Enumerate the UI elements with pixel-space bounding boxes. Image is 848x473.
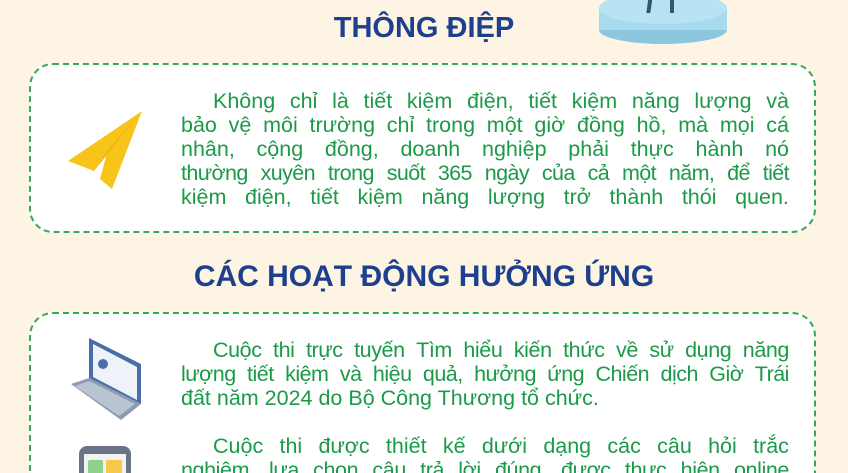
text: message: suốt xyxy=(387,161,425,185)
text: message: trở xyxy=(564,185,591,209)
text: activity 1: về xyxy=(616,338,638,362)
text: activity 1: quả, xyxy=(423,362,463,386)
panel: activities xyxy=(29,312,816,473)
text: message: cá xyxy=(766,113,789,137)
text: activity 1: trực xyxy=(306,338,343,362)
text: message: cộng xyxy=(257,137,303,161)
icon: paper plane xyxy=(68,111,142,189)
text: activity 2: kế xyxy=(443,434,466,458)
text: message: kiệm xyxy=(572,89,617,113)
text: message: một xyxy=(622,161,656,185)
text: activity 1: hiệu xyxy=(373,362,412,386)
text: message: hồ, xyxy=(637,113,666,137)
text: message xyxy=(181,89,790,209)
text: message: kiệm xyxy=(357,185,403,209)
text: message: điện, xyxy=(467,89,514,113)
text: activity 1: hiểu xyxy=(463,338,502,362)
text: activity 2: được xyxy=(318,434,370,458)
text: message: lượng xyxy=(694,89,752,113)
text: message: môi xyxy=(263,113,298,137)
text: message: hành xyxy=(696,137,743,161)
text: message: ngày xyxy=(485,161,529,185)
text: activity 1: năng xyxy=(743,338,789,362)
text: message: trường xyxy=(310,113,375,137)
text: message: chỉ xyxy=(290,89,317,113)
text: message: quen. xyxy=(735,185,789,209)
text: activity 1: kiến xyxy=(514,338,552,362)
text: message: thường xyxy=(181,161,248,185)
text: message: đồng xyxy=(577,113,625,137)
text: message: kiệm xyxy=(181,185,226,209)
text: message: nhân, xyxy=(181,137,235,161)
text: activity 2: trắc xyxy=(753,434,789,458)
icon: plug xyxy=(599,0,727,44)
text: activity 1: thức xyxy=(563,338,605,362)
text: message: mà xyxy=(678,113,708,137)
text: activity 2: dạng xyxy=(543,434,591,458)
text: activity 1: Cuộc xyxy=(213,338,262,362)
text: activity 1: dịch xyxy=(660,362,698,386)
text: message: tiết xyxy=(528,89,557,113)
text: activity 1: lượng xyxy=(181,362,236,386)
text: activity 2: thi xyxy=(279,434,302,458)
text: message: vệ xyxy=(229,113,251,137)
text: message: điện, xyxy=(245,185,292,209)
text: message: thực xyxy=(631,137,674,161)
text: activity 1: thi xyxy=(273,338,295,362)
text: activity 1: hưởng xyxy=(474,362,536,386)
text: message: một xyxy=(487,113,523,137)
text: message: nó xyxy=(765,137,789,161)
text: message: để xyxy=(727,161,750,185)
text: message: trong xyxy=(426,113,475,137)
title: các hoạt động hưởng ứng: CÁC HOẠT ĐỘNG HƯỞNG ỨNG xyxy=(194,260,654,293)
text: message: xuyên xyxy=(261,161,315,185)
text: activity 2: hỏi xyxy=(708,434,737,458)
text: activity 1 xyxy=(181,338,789,410)
icon: laptop xyxy=(71,338,141,420)
text: activity 1: ứng xyxy=(547,362,584,386)
text: activity 1: tuyến xyxy=(354,338,405,362)
text: activity 1: tiết xyxy=(247,362,274,386)
text: message: giờ xyxy=(534,113,565,137)
text: message: lượng xyxy=(488,185,545,209)
text: message: là xyxy=(332,89,349,113)
text: activity 1: sử xyxy=(649,338,674,362)
text: activity 2: câu xyxy=(657,434,692,458)
text: activity 1: kiệm xyxy=(285,362,328,386)
icon: phone xyxy=(79,446,131,473)
text: message: và xyxy=(766,89,789,113)
text: activity 1: Trái xyxy=(755,362,789,386)
text: message: mọi xyxy=(720,113,754,137)
text: message: của xyxy=(542,161,575,185)
text: message: đồng, xyxy=(325,137,379,161)
text: message: bảo xyxy=(181,113,217,137)
text: message: chỉ xyxy=(387,113,414,137)
text: message: tiết xyxy=(310,185,339,209)
text: message: Không xyxy=(213,89,275,113)
text: message: năng xyxy=(421,185,469,209)
text: activity 1: Tìm xyxy=(416,338,452,362)
title: thông điệp: THÔNG ĐIỆP xyxy=(334,12,514,44)
text: message: năm, xyxy=(669,161,714,185)
text: message: trong xyxy=(328,161,374,185)
text: message: cả xyxy=(588,161,609,185)
text: message: thói xyxy=(682,185,716,209)
text: activity 2: Cuộc xyxy=(213,434,263,458)
text: activity 2: thiết xyxy=(386,434,427,458)
text: message: tiết xyxy=(763,161,789,185)
text: activity 1: đất năm 2024 do Bộ Công Thương tổ chức. xyxy=(181,386,599,410)
text: activity 2: các xyxy=(607,434,641,458)
text: activity 1: dụng xyxy=(685,338,731,362)
text: activity 1: Giờ xyxy=(709,362,743,386)
text: message: kiệm xyxy=(407,89,452,113)
text: activity 1: Chiến xyxy=(595,362,649,386)
text: message: thành xyxy=(609,185,663,209)
panel: message xyxy=(29,63,816,233)
text: activity 1: và xyxy=(340,362,362,386)
text: activity 2 xyxy=(181,434,789,473)
text: message: doanh xyxy=(400,137,460,161)
text: message: phải xyxy=(568,137,609,161)
text: message: 365 xyxy=(438,161,472,185)
text: message: nghiệp xyxy=(482,137,547,161)
text: message: tiết xyxy=(364,89,392,113)
text: message: năng xyxy=(632,89,680,113)
text: activity 2: dưới xyxy=(482,434,527,458)
